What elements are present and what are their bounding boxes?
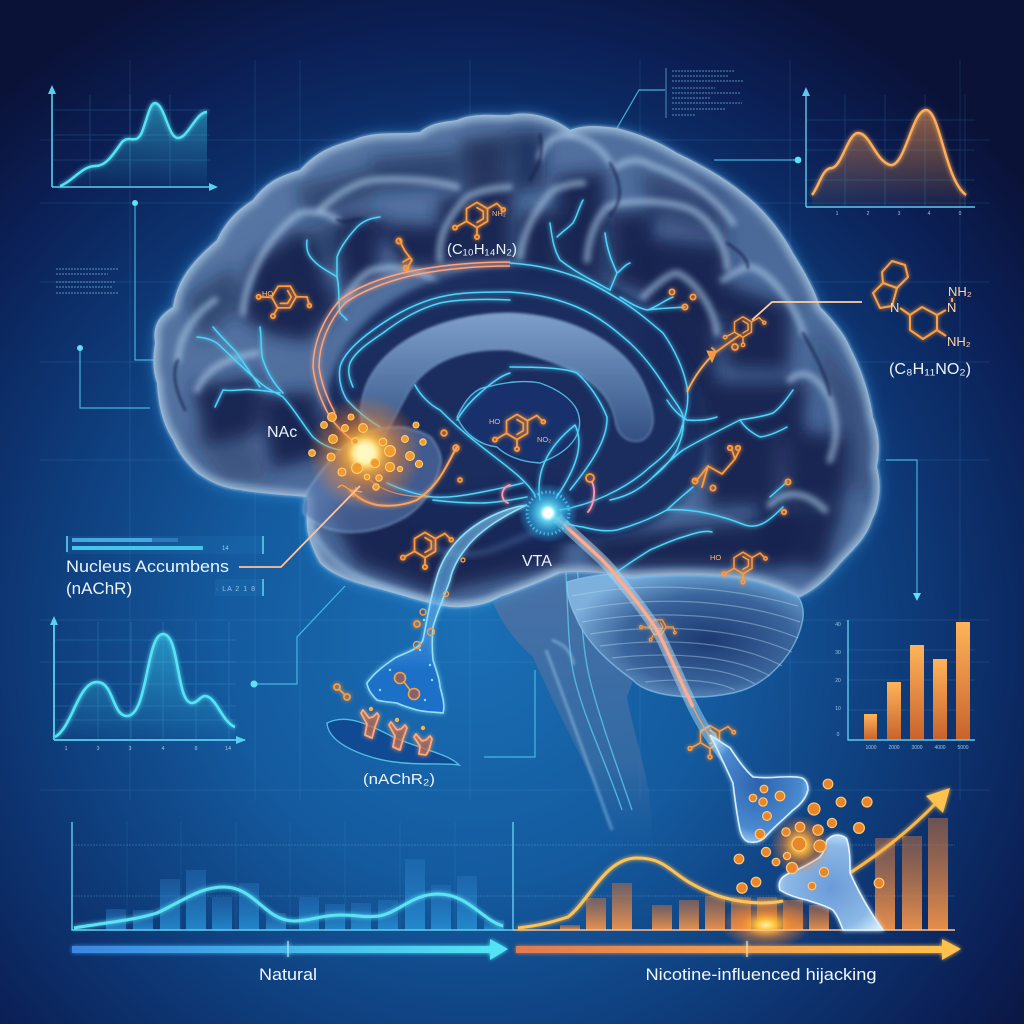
sulci <box>175 135 830 410</box>
tick labels: 0 <box>959 211 962 217</box>
chart: natural (bottom left) <box>72 822 955 930</box>
label: C10H14N2: (C₁₀H₁₄N₂) <box>447 241 517 258</box>
tick labels: 4 <box>928 211 931 217</box>
nucleus accumbens label box: · LA 2 1 8 <box>216 586 256 593</box>
hijacking bars <box>560 818 948 930</box>
brain rim <box>153 113 880 607</box>
NAc lobe <box>303 427 441 532</box>
tick labels: 4 <box>161 746 165 752</box>
tick labels: 2 <box>867 211 870 217</box>
tick labels: 8 <box>194 746 198 752</box>
label: nAChR: (nAChR) <box>66 579 132 598</box>
nucleus accumbens label box: 14 <box>222 546 229 552</box>
axis tick labels: 4000 <box>934 745 946 751</box>
chart: hijacking (bottom right) <box>513 788 955 949</box>
pathway: orange callout to molecule <box>687 302 862 392</box>
neural pathways: blue <box>197 200 793 577</box>
tick labels: 3 <box>898 211 901 217</box>
brain stem <box>493 530 660 845</box>
molecule atom labels: HO <box>262 289 273 298</box>
receptors and membrane <box>327 707 459 765</box>
natural curve <box>74 887 503 928</box>
nucleus accumbens label box <box>66 536 263 596</box>
label: C8H11NO2: (C₈H₁₁NO₂) <box>889 361 971 378</box>
cerebellum <box>567 571 803 697</box>
brain stem highlights <box>546 640 612 830</box>
molecule atom labels: HO <box>489 417 500 426</box>
axon beads <box>414 558 465 648</box>
synapse glow <box>770 815 830 875</box>
molecule atom labels: NO₂ <box>537 435 551 444</box>
thalamus <box>457 382 580 463</box>
brain silhouette <box>153 113 880 607</box>
small text block: top centre <box>666 68 744 118</box>
synapse vesicles <box>394 672 420 700</box>
NAc glow <box>307 395 426 511</box>
label: nAChR2: (nAChR₂) <box>363 771 435 788</box>
large molecule <box>873 261 952 339</box>
molecule atom labels: NH₂ <box>492 209 506 218</box>
tick labels: 1 <box>64 746 68 752</box>
callout dots <box>77 157 921 688</box>
large molecule atoms: NH₂ <box>948 284 972 299</box>
chart: middle-left line chart <box>50 616 246 752</box>
tick labels: 3 <box>96 746 100 752</box>
NAc small molecule <box>338 485 362 497</box>
lobe shadows <box>186 131 870 594</box>
chart: top-left line chart <box>48 85 218 191</box>
NAc particles <box>309 413 426 490</box>
VTA to bottom-right axon tube <box>557 518 744 781</box>
pathway: VTA to NAc orange <box>350 447 457 506</box>
large molecule atoms: N <box>890 300 899 315</box>
corpus callosum arc <box>361 313 653 448</box>
axis tick labels: 10 <box>835 706 841 712</box>
deep interior shadow <box>325 265 706 546</box>
background grid <box>40 60 990 800</box>
stem nerve tube <box>562 530 632 810</box>
gyri ridge highlights <box>178 135 836 510</box>
axis tick labels: 20 <box>835 678 841 684</box>
bar chart: right <box>835 620 975 751</box>
VTA glow <box>518 483 578 543</box>
synapse: postsynaptic terminal <box>779 835 883 930</box>
gyri rim <box>153 113 880 607</box>
chart: top-right line chart <box>802 87 975 217</box>
arrow: hijacking <box>516 939 961 960</box>
callout: nucleus accumbens <box>239 486 360 567</box>
synapse neurotransmitters <box>734 779 884 893</box>
label: nucleus accumbens: Nucleus Accumbens <box>66 557 229 576</box>
pathway: orange double arc <box>313 262 510 443</box>
axis tick labels: 40 <box>835 622 841 628</box>
axis tick labels: 30 <box>835 650 841 656</box>
temporal lobe rim <box>307 513 560 607</box>
label: nicotine-influenced hijacking: Nicotine-influenced hijacking <box>646 965 876 984</box>
amino-acid chain molecules <box>396 238 791 514</box>
free molecule: left synapse <box>334 621 420 700</box>
left axon to synapse <box>367 505 527 713</box>
rising trend arrow <box>850 788 950 873</box>
tick labels: 3 <box>128 746 132 752</box>
axis tick labels: 5000 <box>957 745 969 751</box>
tick labels <box>64 746 231 752</box>
large molecule atoms: N <box>947 300 956 315</box>
hijacking curve <box>518 858 783 928</box>
small text block: left <box>56 269 118 293</box>
label: natural: Natural <box>259 965 317 984</box>
tick labels: 14 <box>225 746 231 752</box>
callout lines <box>80 90 917 757</box>
axis tick labels: 0 <box>837 732 840 738</box>
arrow: natural <box>72 939 508 960</box>
large molecule atoms: NH₂ <box>947 334 971 349</box>
label: VTA: VTA <box>522 553 552 570</box>
axis tick labels: 1000 <box>865 745 877 751</box>
brain outer glow <box>153 113 880 607</box>
natural bars <box>106 859 504 930</box>
molecule atom labels: HO <box>710 553 721 562</box>
temporal lobe band <box>430 530 540 555</box>
tick labels <box>836 211 962 217</box>
tick labels: 1 <box>836 211 839 217</box>
molecules on brain <box>251 202 791 759</box>
axis tick labels: 3000 <box>911 745 923 751</box>
axis tick labels: 2000 <box>888 745 900 751</box>
molecule atom labels <box>262 209 721 562</box>
large molecule atoms <box>890 284 972 349</box>
brain <box>153 113 880 607</box>
axis tick labels <box>835 622 969 751</box>
label: NAc: NAc <box>267 424 297 441</box>
synapse: presynaptic terminal <box>710 735 808 842</box>
